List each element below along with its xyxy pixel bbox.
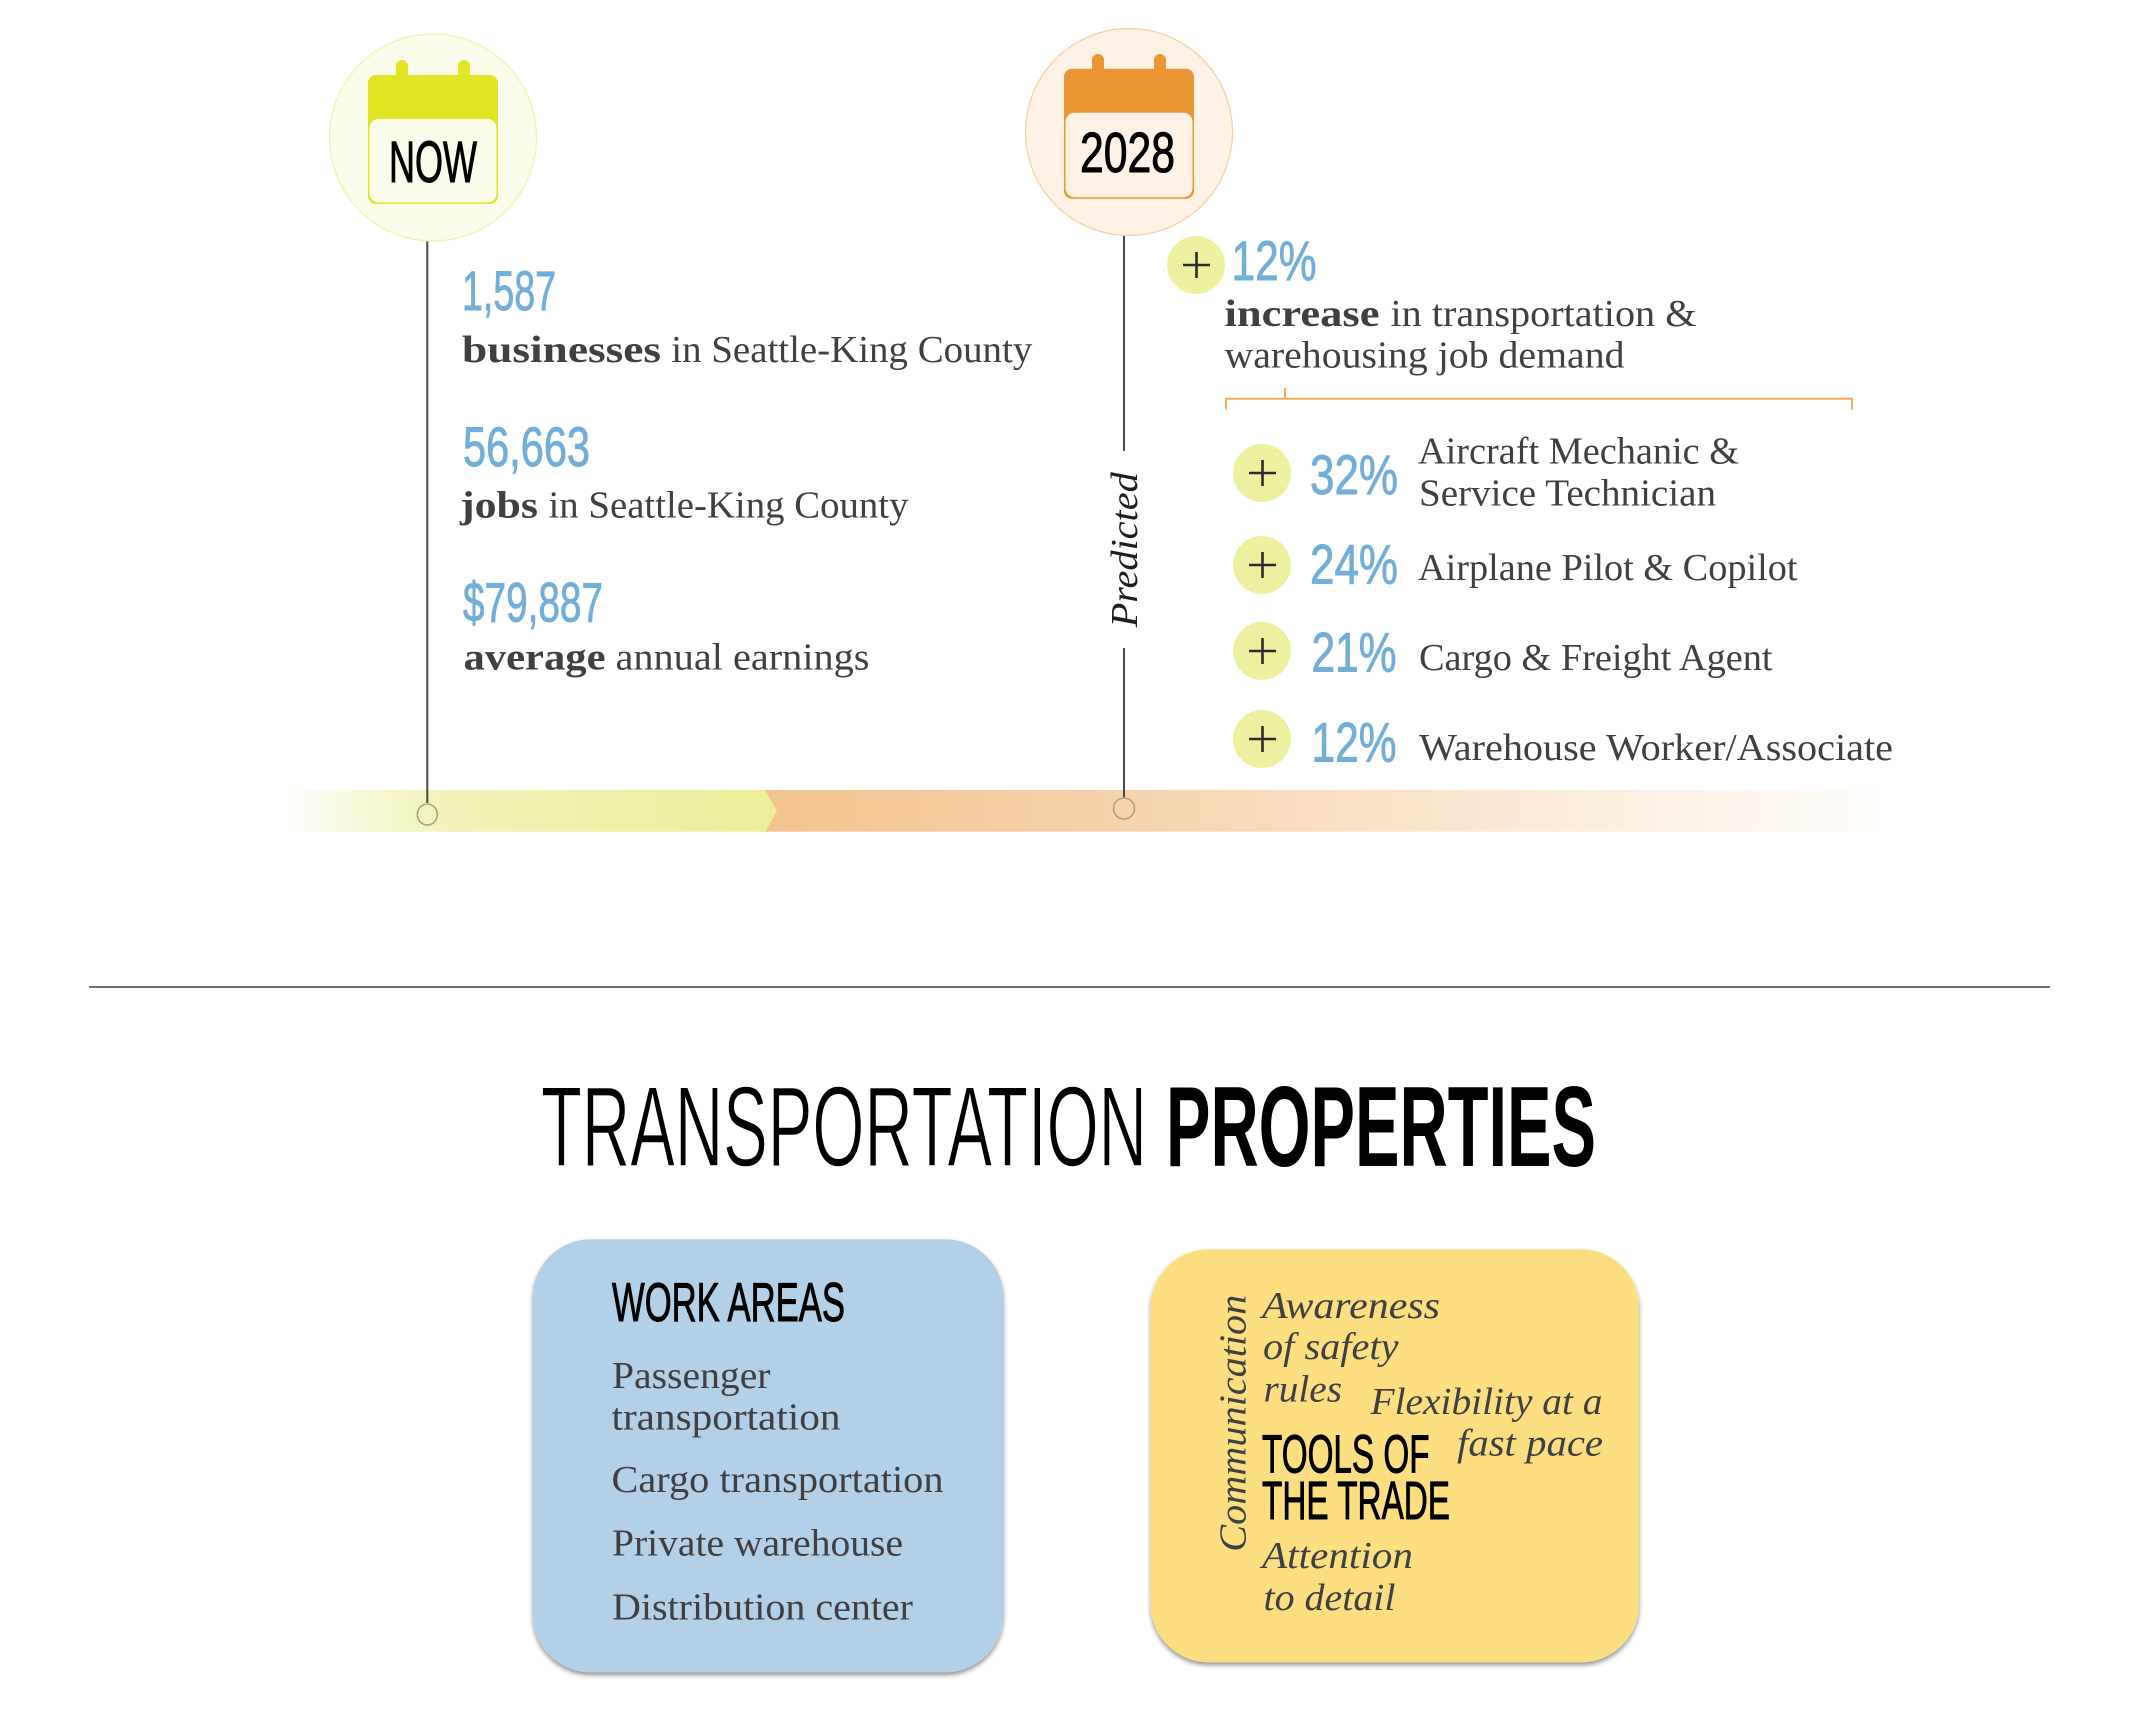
job row: warehouse worker: 12% <box>1312 711 1396 774</box>
skill: communication: Communication <box>1212 1295 1254 1552</box>
stat: jobs: 56,663 <box>463 415 590 478</box>
job row: cargo agent: Cargo & Freight Agent <box>1419 637 1773 679</box>
skill: awareness of safety rules <box>1259 1285 1440 1410</box>
heading: work areas: WORK AREAS <box>612 1271 845 1333</box>
icon: plus badge <box>1167 236 1225 294</box>
predicted label: Predicted <box>1104 471 1146 628</box>
stat: earnings: annual earnings <box>616 636 870 678</box>
icon: now calendar: NOW <box>389 130 477 195</box>
icon: 2028 calendar <box>1026 28 1232 236</box>
list: work areas <box>612 1355 944 1628</box>
skill: attention to detail: Attention <box>1259 1535 1413 1577</box>
job row: aircraft mechanic: Aircraft Mechanic & <box>1418 430 1739 472</box>
skill: awareness of safety rules: rules <box>1264 1368 1342 1410</box>
stat: jobs: jobs <box>459 484 538 526</box>
icon: 2028 calendar: 2028 <box>1080 121 1175 185</box>
heading: tools of the trade: THE TRADE <box>1262 1471 1450 1531</box>
heading: tools of the trade: TOOLS OF <box>1262 1424 1430 1484</box>
job row: aircraft mechanic <box>1233 430 1739 515</box>
stat: overall job demand increase: in transportation & <box>1390 293 1696 335</box>
list: work areas: Private warehouse <box>612 1522 903 1564</box>
job row: airplane pilot: 24% <box>1310 532 1398 596</box>
stat: overall job demand increase <box>1167 229 1696 377</box>
panel: tools of the trade <box>1151 1249 1639 1662</box>
stat: businesses <box>462 259 1032 371</box>
title: PROPERTIES <box>1166 1064 1596 1191</box>
skill: flexibility at a fast pace <box>1369 1381 1603 1464</box>
skill: flexibility at a fast pace: Flexibility at a <box>1369 1381 1602 1423</box>
skill: awareness of safety rules: Awareness <box>1259 1285 1440 1327</box>
stat: earnings <box>463 570 870 678</box>
skill: awareness of safety rules: of safety <box>1263 1326 1399 1368</box>
stat: earnings: $79,887 <box>463 570 603 634</box>
list: work areas: Cargo transportation <box>612 1459 944 1501</box>
stat: businesses: businesses <box>462 329 661 371</box>
job row: airplane pilot <box>1233 532 1798 596</box>
stat: jobs <box>459 415 908 526</box>
job row: aircraft mechanic: 32% <box>1310 443 1398 506</box>
stat: jobs: in Seattle-King County <box>548 484 908 526</box>
stat: overall job demand increase: warehousing job demand <box>1224 335 1624 377</box>
job row: aircraft mechanic: Service Technician <box>1419 473 1716 515</box>
icon: now calendar <box>330 34 536 241</box>
list: work areas: Passenger <box>612 1355 771 1397</box>
list: work areas: transportation <box>612 1396 840 1438</box>
heading: tools of the trade <box>1262 1424 1450 1531</box>
vertical line: now <box>417 241 437 825</box>
job row: cargo agent: 21% <box>1312 621 1396 684</box>
stat: earnings: average <box>464 636 606 678</box>
stat: overall job demand increase: increase <box>1224 293 1380 335</box>
list: work areas: Distribution center <box>612 1586 913 1628</box>
skill: attention to detail <box>1259 1535 1413 1619</box>
stat: overall job demand increase: 12% <box>1232 229 1316 292</box>
stat: businesses: 1,587 <box>462 259 556 322</box>
stat: businesses: in Seattle-King County <box>671 329 1032 371</box>
job row: airplane pilot: Airplane Pilot & Copilot <box>1418 547 1798 589</box>
skill: flexibility at a fast pace: fast pace <box>1457 1422 1603 1464</box>
job row: warehouse worker: Warehouse Worker/Associate <box>1419 727 1893 769</box>
vertical line: 2028 predicted <box>1114 236 1134 819</box>
skill: attention to detail: to detail <box>1264 1577 1396 1619</box>
job row: cargo agent <box>1233 621 1773 684</box>
panel: work areas <box>533 1239 1003 1672</box>
job row: warehouse worker <box>1233 710 1893 774</box>
bracket <box>1226 388 1852 410</box>
title: TRANSPORTATION <box>541 1064 1147 1191</box>
timeline band <box>288 790 1880 832</box>
